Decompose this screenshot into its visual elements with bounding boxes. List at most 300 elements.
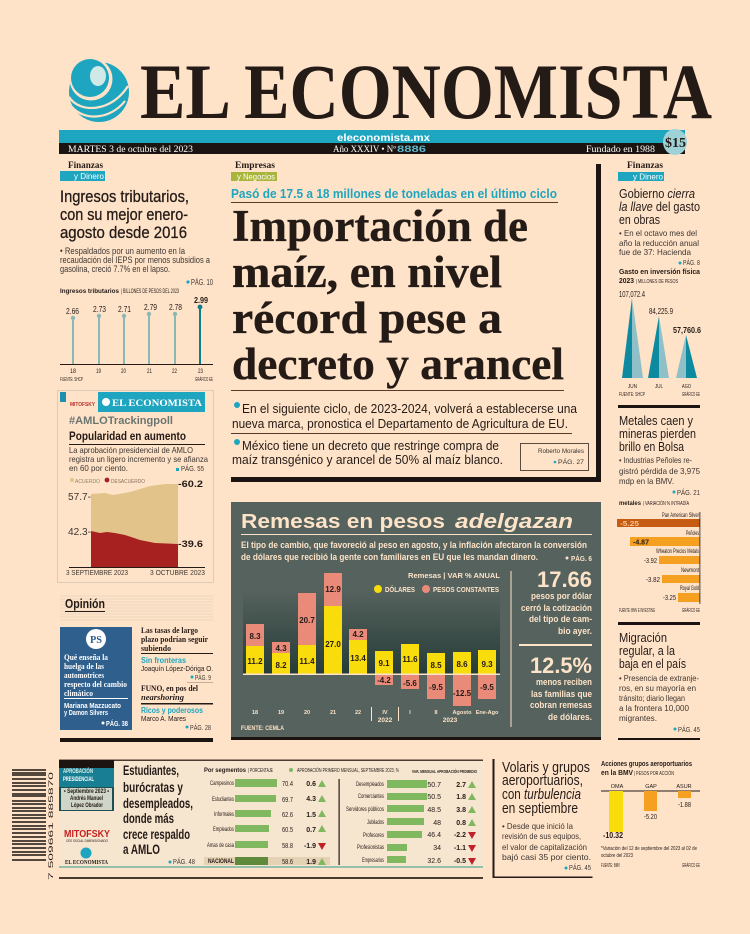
summary text: • Industrias Peñoles re- xyxy=(619,455,692,465)
summary text: ros, en su mayoría en xyxy=(619,684,696,693)
main headline: maíz, en nivel xyxy=(232,247,502,297)
bar value labels: 12.9 xyxy=(325,585,341,594)
heading: en obras xyxy=(619,212,660,227)
heading: baja en el país xyxy=(619,656,686,671)
poll title xyxy=(69,415,205,445)
heading: PÁG. 48 xyxy=(173,857,195,866)
bar chart: segmentos derecha: 32.6 xyxy=(427,858,441,865)
bar value labels: 4.3 xyxy=(275,644,287,653)
poll title: Popularidad en aumento xyxy=(69,429,186,443)
summary text: revisión de sus equipos, xyxy=(502,831,581,841)
heading xyxy=(619,630,686,671)
section tag: finanzas xyxy=(60,160,105,181)
poll text: PÁG. 55 xyxy=(181,464,204,473)
summary text: • Respaldados por un aumento en la xyxy=(60,246,185,256)
panel header: EL ECONOMISTA xyxy=(112,399,202,409)
heading: en septiembre xyxy=(502,800,578,817)
main headline: récord pese a xyxy=(232,293,502,343)
bar chart: acciones aeroportuarios: GAP xyxy=(645,784,657,790)
bar chart: segmentos derecha: -2.2 xyxy=(454,832,466,839)
bar chart: por segmentos xyxy=(204,767,340,866)
bar chart: segmentos derecha: 3.8 xyxy=(456,807,466,814)
heading: Ingresos tributarios, xyxy=(60,187,189,206)
section tag: finanzas: y Dinero xyxy=(74,172,105,181)
bar chart: por segmentos: 0.7 xyxy=(306,827,316,834)
chart axis labels: Ene-Ago xyxy=(476,710,499,716)
chart axis labels: Agosto xyxy=(453,710,472,716)
bar value labels: 11.2 xyxy=(247,657,263,666)
bar chart: metales: -3.82 xyxy=(646,577,660,584)
heading: mineras pierden xyxy=(619,426,696,441)
bar chart: segmentos derecha: 1.8 xyxy=(456,794,466,801)
panel header xyxy=(60,392,205,412)
bar chart: acciones aeroportuarios: -1.88 xyxy=(678,800,691,809)
chart axis labels: 19 xyxy=(278,710,284,716)
section tag: empresas xyxy=(231,160,277,182)
heading: agosto desde 2016 xyxy=(60,223,187,242)
summary text: migrantes. xyxy=(619,714,657,723)
section tag: finanzas: Finanzas xyxy=(68,160,103,170)
mitofsky logo: EL ECONOMISTA xyxy=(65,859,108,866)
triangle chart: gasto en inversion: 84,225.9 xyxy=(649,307,673,316)
bar chart: acciones aeroportuarios: FUENTE: BMV xyxy=(601,863,620,869)
story bullets xyxy=(231,401,578,467)
bar chart: segmentos derecha: 46.4 xyxy=(427,832,441,839)
bar value labels: 9.1 xyxy=(378,659,390,668)
panel: migracion xyxy=(618,630,700,740)
date bar xyxy=(59,129,687,155)
bars: pesos constantes xyxy=(246,573,496,706)
bar chart: metales: Newmont xyxy=(681,568,699,574)
bar value labels: 13.4 xyxy=(350,654,366,663)
summary text: recaudación del IEPS por menos subsidios a xyxy=(60,255,210,265)
summary text: año la reducción anual xyxy=(619,238,699,248)
summary text: gistró pérdida de 3,975 xyxy=(619,466,700,476)
bar chart: acciones aeroportuarios: | PESOS POR ACCIÓN xyxy=(634,770,674,777)
chart axis labels: 22 xyxy=(355,710,361,716)
story bullets: nueva marca, pronostica el Departamento de Agricultura de EU. xyxy=(232,416,568,431)
callout: tipo de cambio: bio ayer. xyxy=(558,626,592,636)
lollipop chart: ingresos tributarios: 23 xyxy=(198,369,203,375)
panel: main story xyxy=(231,160,601,482)
mitofsky logo: CES SOCIAL DIMENSIONADO xyxy=(66,839,108,843)
bar chart: por segmentos: 69.7 xyxy=(282,797,293,804)
opinion column 1: plazo podrían seguir xyxy=(141,635,208,644)
opinion column 1 xyxy=(141,626,213,683)
opinion column 2: PÁG. 28 xyxy=(190,723,211,732)
heading xyxy=(619,413,696,454)
story bullets: En el siguiente ciclo, de 2023-2024, volverá a establecerse una xyxy=(242,401,578,416)
area chart: acuerdo y desacuerdo: DESACUERDO xyxy=(111,479,146,485)
chart axis labels: 21 xyxy=(330,710,336,716)
area chart: acuerdo y desacuerdo: -60.2 xyxy=(178,479,203,490)
callout: remesas menores: menos reciben xyxy=(536,677,592,687)
bar chart: segmentos derecha: VAR. MENSUAL APROBACIÓN PROMEDIO xyxy=(412,767,477,774)
bar chart: metales: Wheaton Precios Metals xyxy=(656,549,699,555)
lollipop chart: ingresos tributarios: 2.66 xyxy=(66,307,79,316)
bar chart: segmentos derecha: 0.8 xyxy=(456,820,466,827)
panel header: MITOFSKY xyxy=(70,402,95,408)
heading xyxy=(60,187,189,242)
area chart: acuerdo y desacuerdo: 3 OCTUBRE 2023 xyxy=(150,570,205,577)
triangle chart: gasto en inversion: GRÁFICO EE xyxy=(682,391,700,398)
bar chart: por segmentos: Amas de casa xyxy=(207,843,234,849)
heading: desempleados, xyxy=(123,796,193,811)
date bar: Fundado en 1988 xyxy=(586,144,656,154)
summary text xyxy=(502,821,591,872)
callout: tipo de cambio: del tipo de cam- xyxy=(529,614,592,624)
opinion column 1: PÁG. 9 xyxy=(195,673,211,682)
lollipop chart: ingresos tributarios: Ingresos tributarios xyxy=(60,288,119,295)
summary text: fue de 37: Hacienda xyxy=(619,247,691,257)
bar chart: segmentos derecha: 34 xyxy=(433,845,441,852)
bar value labels: -12.5 xyxy=(453,689,472,698)
heading xyxy=(123,763,195,866)
remesas description: PÁG. 6 xyxy=(571,554,592,563)
bar value labels: 8.6 xyxy=(456,660,468,669)
panel: AMLO tracking poll xyxy=(58,390,214,582)
triangle chart: gasto en inversion: JUN xyxy=(628,384,637,390)
bar chart: segmentos derecha: 48.5 xyxy=(427,807,441,814)
bar chart: metales: Peñoles xyxy=(686,531,699,537)
bar chart: segmentos derecha: 50.7 xyxy=(427,782,441,789)
opinion heading xyxy=(60,596,213,620)
summary text: • Presencia de extranje- xyxy=(619,674,699,683)
bar chart: acciones aeroportuarios: *Variación del 12 de septiembre del 2023 al 02 de xyxy=(601,846,697,852)
main headline: decreto y arancel xyxy=(232,339,564,389)
bar value labels: 9.3 xyxy=(481,660,493,669)
bar chart: por segmentos: 70.4 xyxy=(282,781,293,788)
bar chart: acciones aeroportuarios: GRÁFICO EE xyxy=(682,862,700,869)
bar chart: por segmentos: | PORCENTAJE xyxy=(248,768,273,774)
opinion blue box: y Damon Silvers xyxy=(64,710,108,717)
bar value labels: 11.6 xyxy=(402,655,418,664)
opinion blue box: Mariana Mazzucato xyxy=(64,703,121,710)
summary text: PÁG. 8 xyxy=(683,258,700,267)
summary text: PÁG. 45 xyxy=(569,863,591,872)
approval tag: PRESIDENCIAL xyxy=(63,777,94,783)
summary text: • Desde que inició la xyxy=(502,821,573,831)
heading: crece respaldo xyxy=(123,827,190,842)
opinion column 2: Ricos y poderosos xyxy=(141,706,203,715)
bar chart: segmentos derecha: Servidores públicos xyxy=(346,807,384,813)
bar chart: segmentos derecha: 2.7 xyxy=(456,782,466,789)
chart axis labels: 18 xyxy=(252,710,258,716)
area chart: acuerdo y desacuerdo: 3 SEPTIEMBRE 2023 xyxy=(66,570,128,577)
section tag: finanzas derecha: Finanzas xyxy=(627,160,664,170)
bar chart: por segmentos: 58.8 xyxy=(282,843,293,850)
heading: Migración xyxy=(619,630,667,645)
date bar: MARTES 3 de octubre del 2023 xyxy=(68,144,194,154)
chart legend: DÓLARES xyxy=(385,585,415,594)
bar chart: metales: -4.87 xyxy=(633,540,649,546)
panel: aprobacion presidencial xyxy=(59,760,483,879)
opinion blue box: huelga de las xyxy=(64,662,104,671)
lollipop chart: ingresos tributarios xyxy=(60,288,213,383)
heading: burócratas y xyxy=(123,780,183,795)
poll text: La aprobación presidencial de AMLO xyxy=(69,445,193,455)
barcode: 7 509661 885870 xyxy=(48,771,55,880)
bar chart: por segmentos: Campesinos xyxy=(210,781,234,787)
bar value labels: -9.5 xyxy=(480,683,494,692)
bar chart: segmentos derecha: -0.5 xyxy=(454,858,466,865)
lollipop chart: ingresos tributarios: GRÁFICO EE xyxy=(195,376,213,383)
heading: la llave del gasto xyxy=(619,199,700,214)
bar chart: segmentos derecha: 50.5 xyxy=(427,794,441,801)
bar chart: segmentos derecha: Profesores xyxy=(363,833,384,839)
opinion blue box: PS xyxy=(90,634,102,646)
lollipop chart: ingresos tributarios: | BILLONES DE PESOS DEL 2023 xyxy=(121,289,179,295)
area chart: acuerdo y desacuerdo: 42.3- xyxy=(68,527,91,538)
approval tag xyxy=(59,760,114,811)
section tag: empresas: Empresas xyxy=(235,160,276,170)
callout: remesas menores xyxy=(530,653,592,722)
callout: tipo de cambio: pesos por dólar xyxy=(531,591,592,601)
callout: remesas menores: las familias que xyxy=(531,689,592,699)
triangle chart: gasto en inversion: Gasto en inversión física xyxy=(619,269,700,276)
bar chart: segmentos derecha: APROBACIÓN PRIMERO MENSUAL, SEPTIEMBRE 2023, % xyxy=(297,767,399,774)
bar chart: metales xyxy=(617,500,700,614)
lollipop chart: ingresos tributarios: 21 xyxy=(147,369,152,375)
chart axis labels: I xyxy=(409,710,411,716)
triangle chart: gasto en inversion: AGO xyxy=(682,384,692,390)
byline box xyxy=(520,444,588,470)
bar chart: segmentos derecha: Jubilados xyxy=(367,820,384,826)
opinion column 1: Sin fronteras xyxy=(141,656,187,665)
panel: remesas xyxy=(231,502,601,740)
summary text xyxy=(619,228,700,267)
triangle chart: gasto en inversion: 57,760.6 xyxy=(673,326,701,335)
bar chart: metales: metales xyxy=(619,500,641,507)
lollipop chart: ingresos tributarios: 20 xyxy=(121,369,126,375)
area chart: acuerdo y desacuerdo xyxy=(66,478,205,577)
story bullets: maíz transgénico y arancel de 50% al maíz blanco. xyxy=(232,452,503,467)
date bar: 8886 xyxy=(397,144,426,154)
bar chart: por segmentos: 1.5 xyxy=(306,812,316,819)
kicker: Pasó de 17.5 a 18 millones de toneladas en el último ciclo xyxy=(231,187,557,201)
byline box: Roberto Morales xyxy=(538,448,585,455)
chart axis labels: 2023 xyxy=(443,717,458,724)
panel: volaris xyxy=(492,759,700,878)
bar chart: metales: FUENTE: BMV E INVESTING xyxy=(619,608,655,614)
heading xyxy=(619,186,700,227)
bar chart: metales: -5.25 xyxy=(620,521,639,528)
panel: ingresos tributarios xyxy=(60,160,213,383)
callout: remesas menores: de dólares. xyxy=(548,712,592,722)
opinion column 2: nearshoring xyxy=(141,693,184,702)
bar value labels: 8.2 xyxy=(275,661,287,670)
chart axis labels xyxy=(252,710,499,724)
heading: Gobierno cierra xyxy=(619,186,695,201)
bars: dolares xyxy=(246,606,496,674)
bar chart: acciones aeroportuarios: -10.32 xyxy=(603,831,623,840)
area chart: acuerdo y desacuerdo: 57.7- xyxy=(68,492,91,503)
remesas title xyxy=(241,511,592,535)
summary text: PÁG. 45 xyxy=(678,725,700,734)
mitofsky logo: MITOFSKY xyxy=(64,828,110,840)
heading: Estudiantes, xyxy=(123,763,179,778)
heading: con turbulencia xyxy=(502,786,581,803)
bar value labels: -9.5 xyxy=(429,683,443,692)
triangle chart: gasto en inversion xyxy=(619,269,701,398)
chart axis labels: IV xyxy=(382,710,388,716)
bar chart: remesas xyxy=(243,571,500,724)
lollipop chart: ingresos tributarios: 18 xyxy=(70,369,77,375)
bar chart: acciones aeroportuarios: Acciones grupos aeroportuarios xyxy=(601,761,692,768)
heading: Metales caen y xyxy=(619,413,693,428)
bar chart: por segmentos: NACIONAL xyxy=(208,859,234,865)
triangle chart: gasto en inversion: 2023 xyxy=(619,278,634,285)
opinion blue box: automotrices xyxy=(64,671,104,680)
section tag: finanzas derecha: y Dinero xyxy=(633,172,664,182)
triangle chart: gasto en inversion: | MILLONES DE PESOS xyxy=(636,279,678,285)
bar chart: metales: -3.25 xyxy=(663,595,676,602)
bar chart: por segmentos: Informales xyxy=(214,812,234,818)
bar chart: acciones aeroportuarios: octubre del 2023 xyxy=(601,853,633,859)
poll text: registra un ligero incremento y se afianza xyxy=(69,454,208,464)
summary text: • En el octavo mes del xyxy=(619,228,697,238)
opinion column 2 xyxy=(141,684,213,732)
bar value labels: 27.0 xyxy=(325,640,341,649)
heading: a AMLO xyxy=(123,842,160,857)
bar chart: metales: Pan American Silver xyxy=(662,513,699,519)
lollipop chart: ingresos tributarios: 2.99 xyxy=(194,296,208,305)
triangle chart: gasto en inversion: JUL xyxy=(655,384,663,390)
bar chart: acciones aeroportuarios xyxy=(601,761,700,869)
opinion blue box xyxy=(60,627,132,730)
main headline: Importación de xyxy=(232,201,528,251)
bar chart: segmentos derecha: Comerciantes xyxy=(358,794,384,800)
remesas title: Remesas en pesos xyxy=(241,511,445,533)
bar chart: segmentos derecha: 48 xyxy=(433,820,441,827)
approval tag: López Obrador xyxy=(71,803,103,809)
summary text: el valor de capitalización xyxy=(502,842,587,852)
area chart: acuerdo y desacuerdo: -39.6 xyxy=(178,539,203,550)
summary text: a la frontera 10,000 xyxy=(619,704,690,713)
summary text: bajó casi 35 por ciento. xyxy=(502,852,591,862)
summary text: PÁG. 21 xyxy=(677,488,700,497)
remesas description xyxy=(241,540,592,563)
logo icon xyxy=(69,58,129,122)
bar chart: por segmentos: Por segmentos xyxy=(204,767,246,774)
remesas description: El tipo de cambio, que favoreció al peso en agosto, y la inflación afectaron la conversión xyxy=(241,540,587,550)
date bar: $15 xyxy=(665,136,686,151)
bar chart: acciones aeroportuarios: -5.20 xyxy=(644,812,657,821)
lollipop chart: ingresos tributarios: 19 xyxy=(96,369,101,375)
opinion blue box: climático xyxy=(64,689,93,698)
lollipop chart: ingresos tributarios: 2.71 xyxy=(118,305,131,314)
poll text xyxy=(69,445,208,473)
bar value labels: 8.3 xyxy=(249,632,261,641)
bar value labels: -4.2 xyxy=(377,676,391,685)
date bar: eleconomista.mx xyxy=(337,132,430,144)
bar chart: por segmentos: 0.6 xyxy=(306,781,316,788)
summary text: gasolina, creció 7.7% en el lapso. xyxy=(60,264,170,274)
chart axis labels: 2022 xyxy=(378,717,393,724)
bar chart: metales: GRÁFICO EE xyxy=(682,607,700,614)
remesas title: adelgazan xyxy=(455,511,573,533)
opinion column 1: Las tasas de largo xyxy=(141,626,198,635)
byline box: PÁG. 27 xyxy=(558,457,584,466)
callout: tipo de cambio: 17.66 xyxy=(537,567,592,592)
chart legend: PESOS CONSTANTES xyxy=(433,585,499,594)
callout: tipo de cambio xyxy=(521,567,592,636)
callout: tipo de cambio: cerró la cotización xyxy=(521,603,592,613)
bar chart: por segmentos: -1.9 xyxy=(304,843,316,850)
opinion heading: Opinión xyxy=(65,596,105,611)
lollipop chart: ingresos tributarios: FUENTE: SHCP xyxy=(60,377,83,383)
summary text: mdp en la BMV. xyxy=(619,476,674,486)
remesas description: de dólares que recibió la gente con familiares en EU que les mandan dinero. xyxy=(241,552,538,562)
heading xyxy=(502,759,590,817)
section tag: empresas: y Negocios xyxy=(237,172,275,182)
triangle chart: gasto en inversion: 107,072.4 xyxy=(619,290,645,299)
date bar: Año XXXIV • Nº xyxy=(333,144,396,154)
lollipop chart: ingresos tributarios: 2.78 xyxy=(169,303,182,312)
callout: remesas menores: 12.5% xyxy=(530,653,592,678)
bar chart: por segmentos: Empleados xyxy=(213,827,234,833)
bar chart: segmentos derecha: Empresarios xyxy=(362,858,384,864)
bar chart: segmentos derecha: Profesionistas xyxy=(357,845,384,851)
bar chart: por segmentos: Estudiantes xyxy=(212,797,234,803)
chart legend xyxy=(374,571,500,594)
bar chart: metales: Royal Gold xyxy=(680,586,699,592)
panel: opinion xyxy=(60,596,213,742)
page reference xyxy=(186,278,213,287)
summary text xyxy=(60,246,210,274)
heading: aeroportuarios, xyxy=(502,772,583,789)
chart axis labels: 20 xyxy=(304,710,310,716)
opinion blue box: respecto del cambio xyxy=(64,680,127,689)
section tag: finanzas derecha xyxy=(618,160,664,182)
bar value labels: -5.6 xyxy=(403,679,417,688)
bar value labels: 20.7 xyxy=(299,616,315,625)
area chart: acuerdo y desacuerdo: ACUERDO xyxy=(75,479,101,485)
bar chart: por segmentos: 1.9 xyxy=(306,859,316,866)
opinion column 1: subiendo xyxy=(141,644,171,653)
bar chart: por segmentos: 62.6 xyxy=(282,812,293,819)
bar value labels: 11.4 xyxy=(299,657,315,666)
main headline xyxy=(232,201,564,389)
heading: brillo en Bolsa xyxy=(619,439,685,454)
bar value labels xyxy=(247,585,494,698)
approval tag: • Septiembre 2023 • xyxy=(64,789,109,795)
page reference: PÁG. 10 xyxy=(191,278,213,287)
poll text: en 60 por ciento. xyxy=(69,463,128,473)
triangle chart: gasto en inversion: FUENTE: SHCP xyxy=(619,392,645,398)
chart axis labels: II xyxy=(434,710,438,716)
lollipop chart: ingresos tributarios: 22 xyxy=(172,369,177,375)
lollipop chart: ingresos tributarios: 2.73 xyxy=(93,305,106,314)
source: FUENTE: CEMLA xyxy=(241,726,285,732)
bar chart: segmentos derecha: Desempleados xyxy=(356,782,384,788)
bar chart: por segmentos: 60.5 xyxy=(282,827,293,834)
barcode xyxy=(12,770,55,880)
lollipop chart: ingresos tributarios: 2.79 xyxy=(144,303,157,312)
chart legend: Remesas | VAR % ANUAL xyxy=(408,571,500,580)
summary text xyxy=(619,455,700,497)
bar chart: metales: -3.92 xyxy=(644,558,657,565)
bar chart: acciones aeroportuarios: en la BMV xyxy=(601,770,633,777)
opinion column 2: FUNO, en pos del xyxy=(141,684,199,693)
opinion column 2: Marco A. Mares xyxy=(141,714,186,723)
heading: con su mejor enero- xyxy=(60,205,188,224)
poll title: #AMLOTrackingpoll xyxy=(69,415,173,427)
summary text xyxy=(619,674,700,734)
heading: Volaris y grupos xyxy=(502,759,590,776)
opinion blue box: PÁG. 38 xyxy=(106,719,128,728)
bar chart: acciones aeroportuarios: ASUR xyxy=(676,784,692,790)
